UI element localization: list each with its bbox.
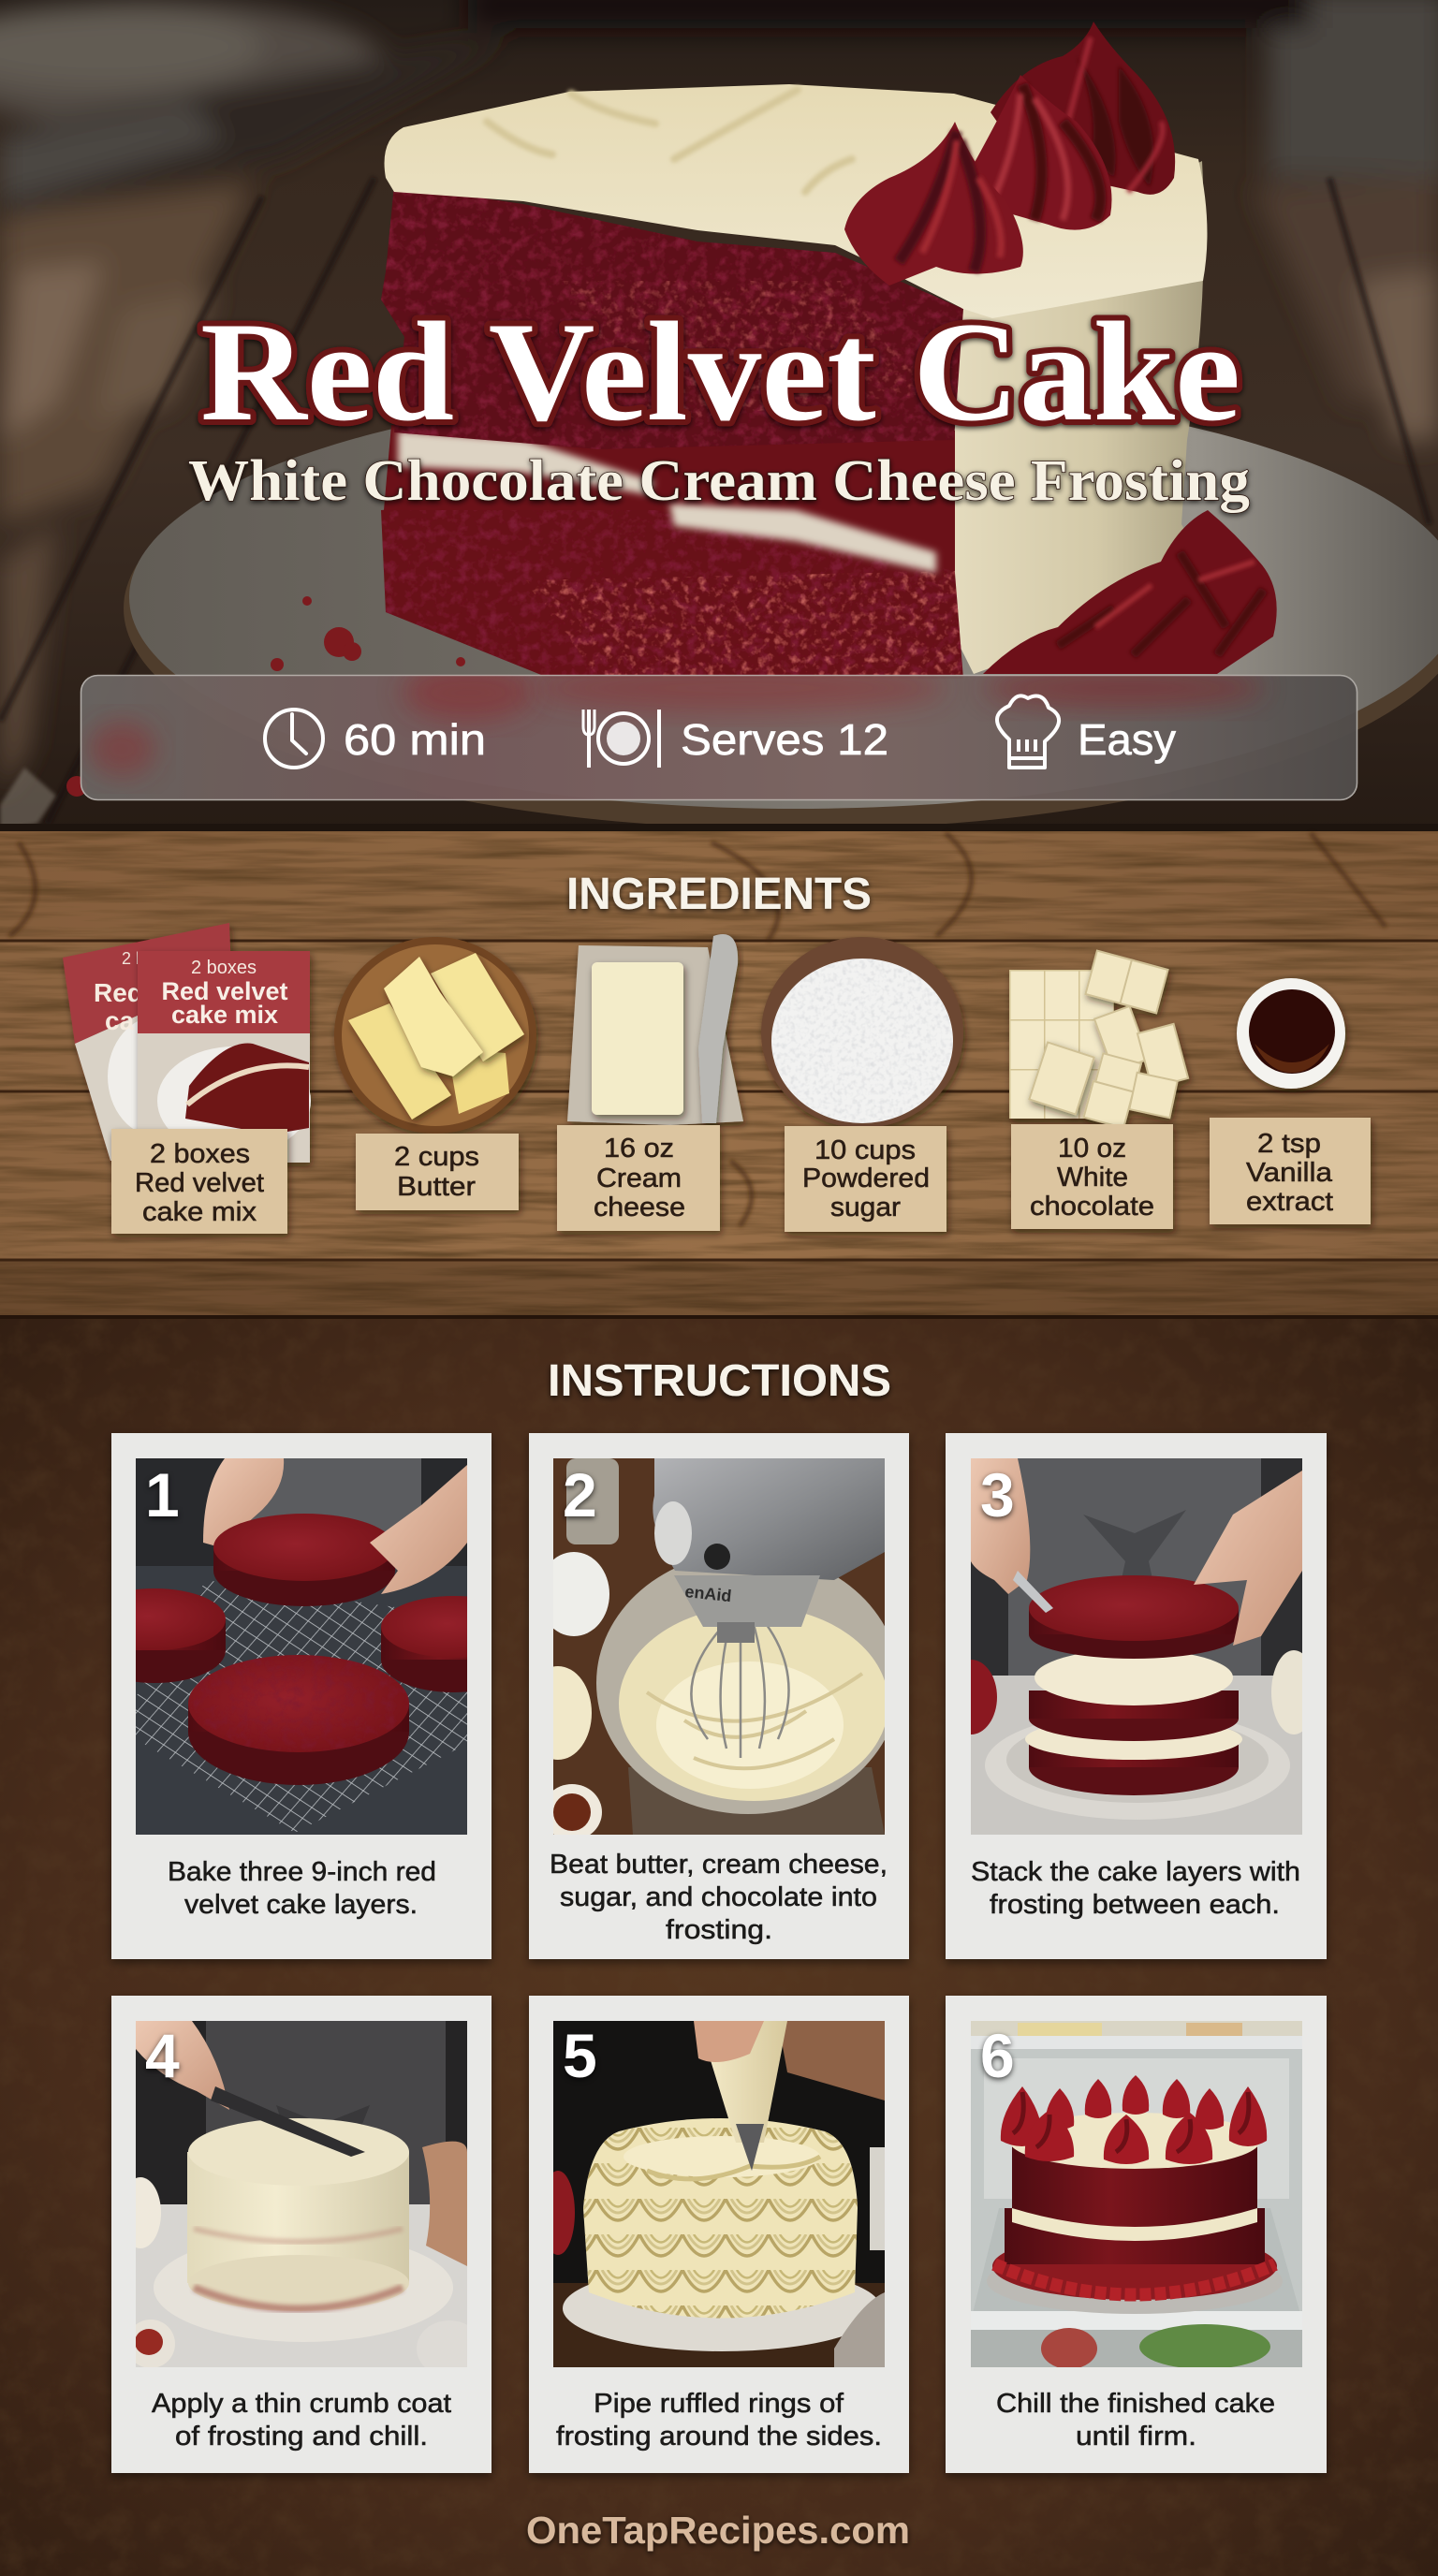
label: white chocolate: 10 oz [1058,1134,1126,1164]
panel: instructions [0,1319,1438,2576]
ingredient: vanilla [1237,978,1345,1089]
step text: Pipe ruffled rings of [594,2389,844,2419]
front box: cake mix [171,1001,278,1029]
label: cake mix: 2 boxes [150,1139,250,1169]
step text: of frosting and chill. [175,2422,428,2452]
step text: sugar, and chocolate into [560,1882,877,1912]
step text: frosting between each. [990,1890,1280,1920]
title: Red Velvet Cake [200,293,1240,450]
step text: until firm. [1076,2422,1196,2452]
photo: baking cake layers [136,1458,467,1835]
cake cream side [936,161,1204,674]
wood table background [0,0,1438,831]
wood background [0,831,1438,1319]
stat: difficulty: Easy [1078,715,1176,764]
label: cream cheese: cheese [594,1193,685,1222]
step card 6 [946,1996,1327,2473]
label: powdered sugar: sugar [830,1193,901,1222]
photo: chilled cake in fridge [971,2021,1302,2367]
label: butter: 2 cups [394,1142,479,1172]
step text: Beat butter, cream cheese, [550,1850,888,1880]
step text: Chill the finished cake [996,2389,1275,2419]
front box: 2 boxes [191,958,257,978]
stat: servings: Serves 12 [681,715,888,764]
cake slice [66,22,1277,797]
cake middle frosting [384,425,955,573]
ingredient: white chocolate [1009,951,1188,1128]
label: powdered sugar: 10 cups [814,1135,916,1165]
step text [996,2389,1275,2452]
step text: Apply a thin crumb coat [152,2389,451,2419]
step text: Bake three 9-inch red [168,1857,436,1887]
step card 5 [529,1996,909,2473]
label: vanilla [1210,1118,1371,1224]
info bar [81,664,1357,800]
step card 2 [524,1433,909,1959]
step number: 2 [563,1460,597,1530]
label: white chocolate: chocolate [1030,1192,1154,1222]
label: cream cheese: Cream [596,1164,682,1193]
photo: mixing frosting: enAid [684,1582,732,1605]
label: cake mix: Red velvet [135,1168,264,1198]
label: cream cheese [557,1125,720,1231]
photo: stacking layers [971,1458,1302,1835]
crumbs [66,596,465,797]
step card 3 [945,1433,1327,1959]
step number: 5 [563,2021,597,2090]
ingredient: cake mix boxes [63,923,311,1163]
bottom red piping [983,510,1277,674]
back box: Red [94,978,143,1007]
label: vanilla: extract [1246,1187,1333,1217]
step text: velvet cake layers. [184,1890,418,1920]
panel: ingredients [0,831,1438,1319]
photo: mixing frosting [553,1458,885,1835]
heading: ingredients: INGREDIENTS [566,870,872,919]
label: white chocolate: White [1057,1163,1128,1193]
cake top frosting [385,84,1207,318]
step number: 6 [980,2021,1015,2090]
icon: plate and cutlery [583,710,659,768]
photo: crumb coat [136,2021,467,2367]
step card 4 [111,1996,492,2473]
footer website: OneTapRecipes.com [526,2509,910,2552]
red rosettes [844,22,1175,285]
photo: piping frosting [553,2021,885,2367]
label: powdered sugar [785,1126,946,1232]
ingredient: powdered sugar bowl [761,937,963,1128]
step card 1 [83,1433,527,1959]
cake bottom red layer [381,496,963,679]
label: vanilla: 2 tsp [1257,1129,1321,1159]
panel: hero photo [0,0,1438,831]
plate [124,427,1438,824]
label: butter [356,1134,519,1210]
ingredient: cream cheese [567,934,743,1125]
back box [63,923,231,1161]
label: powdered sugar: Powdered [802,1164,930,1193]
step text [971,1857,1300,1920]
back box: ca [105,1006,135,1035]
step text: frosting around the sides. [556,2422,882,2452]
subtitle: White Chocolate Cream Cheese Frosting [188,449,1250,513]
label: cream cheese: 16 oz [604,1134,674,1164]
step text: frosting. [666,1915,772,1945]
ingredient: butter bowl [334,937,536,1134]
step number: 4 [145,2021,180,2090]
label: cake mix [111,1129,287,1234]
step text: Stack the cake layers with [971,1857,1300,1887]
back box: 2 b [122,949,145,968]
step text [168,1857,436,1920]
front box: Red velvet [161,977,288,1005]
step number: 3 [980,1460,1015,1530]
icon: chef hat [997,695,1059,768]
cake top red layer [381,185,963,449]
step text [550,1850,888,1945]
step number: 1 [145,1460,180,1530]
stat: time: 60 min [344,715,486,764]
step text [152,2389,451,2452]
step text [556,2389,882,2452]
label: vanilla: Vanilla [1246,1158,1333,1188]
label: butter: Butter [397,1172,476,1202]
icon: clock [265,710,323,768]
front box [138,951,311,1163]
heading: instructions: INSTRUCTIONS [548,1356,891,1406]
label: white chocolate [1011,1124,1173,1229]
dark background [0,1319,1438,2576]
label: cake mix: cake mix [142,1197,257,1227]
